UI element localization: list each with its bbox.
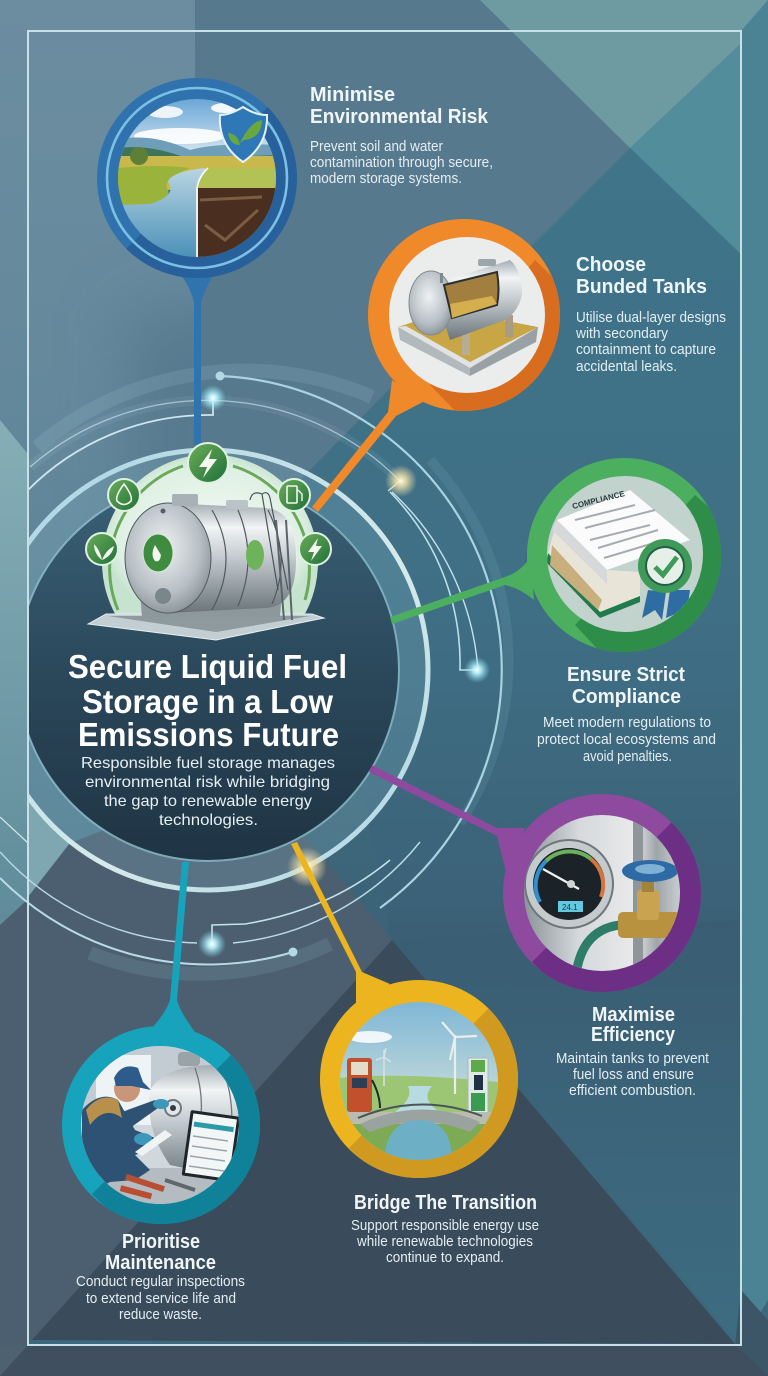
- heading: Minimise: [310, 84, 395, 106]
- title: Storage in a Low: [82, 683, 333, 720]
- heading: Efficiency: [591, 1024, 676, 1046]
- body text: [351, 1218, 539, 1266]
- image: gauge and valve: 24.1: [562, 903, 578, 912]
- connector: teal to maintenance: [148, 862, 195, 1032]
- panel: bridge the transition: [320, 980, 538, 1265]
- glowing orbit nodes: [198, 372, 490, 958]
- icon: droplet: [108, 479, 140, 511]
- body text: protect local ecosystems and: [537, 732, 716, 748]
- icon: energy bolt right: [299, 533, 331, 565]
- body text: while renewable technologies: [356, 1234, 533, 1250]
- summary: technologies.: [159, 812, 258, 829]
- body text: [575, 310, 726, 375]
- body text: contamination through secure,: [310, 155, 493, 171]
- image: technician inspecting tank: [80, 1045, 245, 1208]
- image: river and soil: [118, 98, 280, 260]
- connector: purple to efficiency: [369, 765, 525, 872]
- badge: blue: [97, 78, 297, 278]
- heading: Maximise: [592, 1004, 675, 1026]
- panel: minimise environmental risk: [97, 78, 492, 278]
- central title and summary: [68, 648, 347, 829]
- heading: [576, 254, 707, 298]
- heading: Prioritise: [122, 1231, 200, 1253]
- badge: green: [527, 458, 721, 652]
- body text: [310, 139, 493, 187]
- tank body: [125, 493, 296, 620]
- icon: shield with leaf: [220, 107, 267, 162]
- summary: the gap to renewable energy: [104, 793, 312, 810]
- summary: [81, 755, 335, 829]
- panel: prioritise maintenance: [62, 1026, 260, 1319]
- lower left orbit lines: [0, 817, 293, 964]
- image: compliance documents: COMPLIANCE: [571, 489, 626, 511]
- heading: Maintenance: [105, 1252, 216, 1274]
- panel: choose bunded tanks: [368, 219, 726, 411]
- image: gauge and valve: [524, 822, 678, 968]
- body text: Utilise dual-layer designs: [576, 310, 726, 326]
- badge: orange: [368, 219, 560, 411]
- badge: teal: [62, 1026, 260, 1224]
- image: pumps, turbines and bridge: [340, 1022, 500, 1162]
- icon halo: [102, 454, 318, 622]
- body text: Maintain tanks to prevent: [556, 1051, 709, 1067]
- summary: environmental risk while bridging: [85, 774, 330, 791]
- body text: continue to expand.: [386, 1250, 504, 1266]
- connector: blue to environmental risk: [178, 272, 216, 445]
- body text: reduce waste.: [119, 1307, 202, 1323]
- icon: leaves: [86, 533, 118, 565]
- base platform: [88, 590, 324, 640]
- central tank illustration: [86, 443, 331, 640]
- decorative orbit arcs: [0, 371, 508, 974]
- left margin band: [0, 0, 27, 925]
- title: [68, 648, 347, 753]
- body text: Support responsible energy use: [351, 1218, 539, 1234]
- body text: [76, 1274, 245, 1323]
- body text: to extend service life and: [86, 1291, 236, 1307]
- body text: Conduct regular inspections: [76, 1274, 245, 1290]
- badge: yellow: [320, 980, 518, 1178]
- heading: Bunded Tanks: [576, 276, 707, 298]
- body text: [537, 715, 716, 765]
- heading: Choose: [576, 254, 646, 276]
- connector: yellow to bridge: [291, 842, 390, 1005]
- body text: Prevent soil and water: [310, 139, 443, 155]
- connector: orange to bunded tanks: [312, 380, 423, 512]
- heading: [567, 664, 685, 708]
- body text: Meet modern regulations to: [543, 715, 711, 731]
- heading: [105, 1231, 216, 1274]
- body text: efficient combustion.: [569, 1083, 696, 1099]
- body text: [556, 1051, 709, 1099]
- heading: Environmental Risk: [310, 106, 489, 128]
- image: bunded tank: [398, 259, 538, 376]
- panel: ensure strict compliance: [527, 458, 721, 764]
- icon: energy bolt top: [188, 443, 228, 483]
- icon: fuel pump: [278, 479, 310, 511]
- title: Emissions Future: [78, 716, 339, 753]
- heading: [591, 1004, 676, 1046]
- body text: accidental leaks.: [576, 359, 677, 375]
- image: compliance documents: [546, 489, 692, 620]
- body text: fuel loss and ensure: [573, 1067, 694, 1083]
- body text: containment to capture: [576, 342, 716, 358]
- heading: Compliance: [572, 686, 681, 708]
- connector: green to compliance: [390, 558, 534, 624]
- badge: purple: [503, 794, 701, 992]
- title: Secure Liquid Fuel: [68, 648, 347, 685]
- heading: Ensure Strict: [567, 664, 685, 686]
- panel: maximise efficiency: [503, 794, 709, 1095]
- central hub circle: [17, 479, 399, 861]
- body text: avoid penalties.: [583, 749, 672, 765]
- body text: modern storage systems.: [310, 171, 462, 187]
- heading: Bridge The Transition: [354, 1192, 537, 1214]
- summary: Responsible fuel storage manages: [81, 755, 335, 772]
- heading: [310, 84, 489, 128]
- body text: with secondary: [575, 326, 669, 342]
